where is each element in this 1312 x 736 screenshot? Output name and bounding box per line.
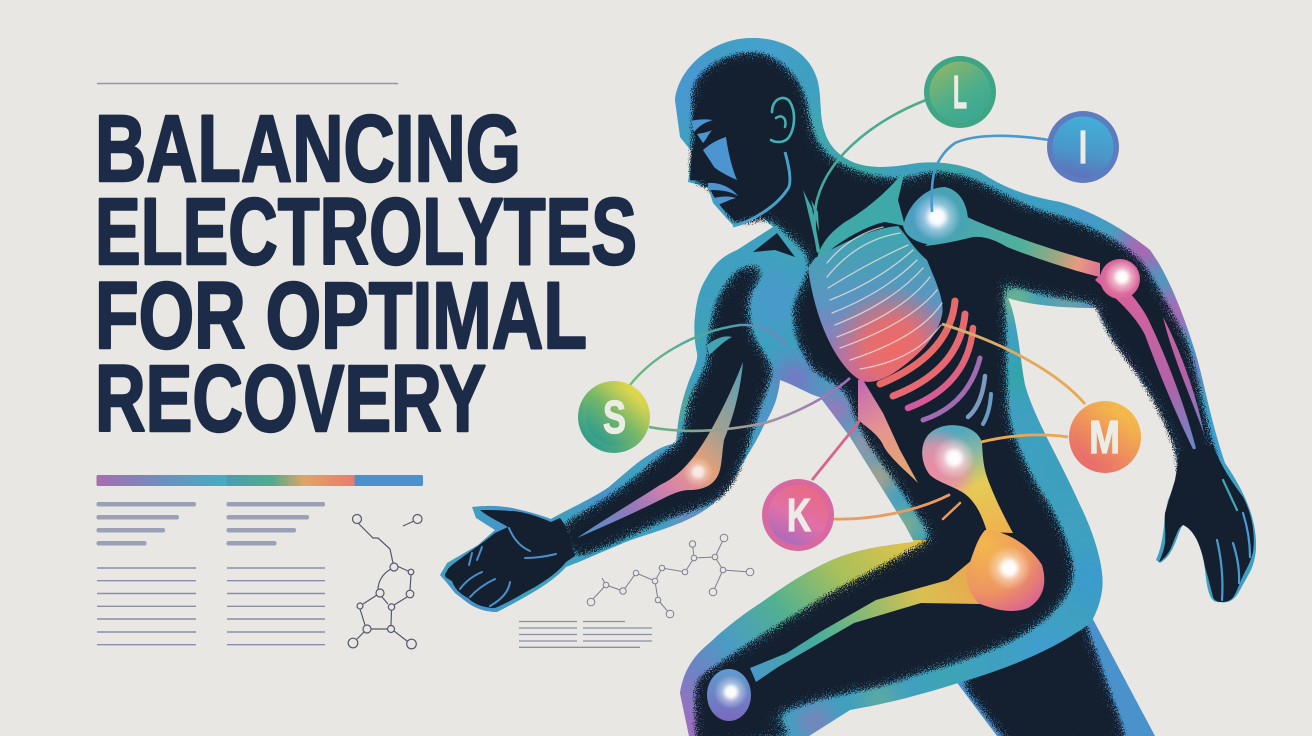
back leg	[955, 610, 1155, 736]
ribcage	[808, 226, 943, 382]
jaw line	[733, 152, 790, 226]
face highlights	[691, 119, 738, 205]
title: RECOVERY	[95, 346, 486, 452]
right elbow joint	[1100, 259, 1140, 299]
shoulder joint	[903, 187, 968, 245]
node: I: I	[1079, 121, 1087, 173]
pelvis bone	[922, 425, 1013, 533]
title: FOR OPTIMAL	[95, 263, 587, 369]
connector: I	[932, 136, 1049, 212]
node: S: S	[603, 391, 626, 443]
node: M	[1069, 401, 1141, 473]
femur shaft	[750, 560, 980, 682]
node: K: K	[787, 489, 811, 541]
node: S	[578, 381, 650, 453]
title: BALANCING	[95, 96, 521, 202]
small caption lines	[519, 622, 652, 647]
ear	[771, 98, 794, 142]
connector: S upper	[630, 325, 787, 385]
title: ELECTROLYTES	[95, 179, 637, 285]
shoulder stripe	[816, 170, 905, 262]
multicolor legend bar	[96, 475, 423, 486]
top rule	[97, 82, 398, 84]
lower ribs	[880, 301, 991, 424]
connector: M left	[981, 435, 1068, 442]
left hand	[445, 510, 575, 608]
node: I	[1047, 111, 1119, 183]
dark left arm	[559, 265, 773, 557]
connector: K lower	[834, 495, 960, 519]
body colour rim	[430, 20, 1270, 736]
neck strokes	[803, 190, 820, 254]
upper chest wedge	[753, 233, 795, 257]
abdomen	[858, 380, 918, 483]
molecule diagram center	[587, 534, 754, 618]
knee joint	[707, 669, 751, 721]
title	[95, 96, 637, 452]
hip joint	[966, 530, 1044, 611]
molecule diagram left	[348, 514, 422, 649]
figure: human body	[430, 20, 1270, 736]
dark crisp face	[690, 100, 788, 221]
text placeholder column 2	[226, 502, 325, 645]
connector: L	[815, 100, 926, 252]
connector: M upper	[942, 324, 1085, 404]
connector: S lower	[649, 378, 850, 431]
dark body silhouette	[690, 53, 1225, 736]
node: K	[762, 479, 834, 551]
connector: K upper	[812, 420, 860, 480]
right arm humerus	[925, 216, 1100, 277]
right hand	[1159, 445, 1254, 602]
right forearm bones	[1095, 270, 1204, 461]
node: L: L	[953, 66, 967, 118]
text placeholder column 1	[96, 502, 196, 645]
left arm highlights	[577, 336, 743, 538]
node: M: M	[1089, 411, 1120, 463]
node: L	[924, 56, 996, 128]
